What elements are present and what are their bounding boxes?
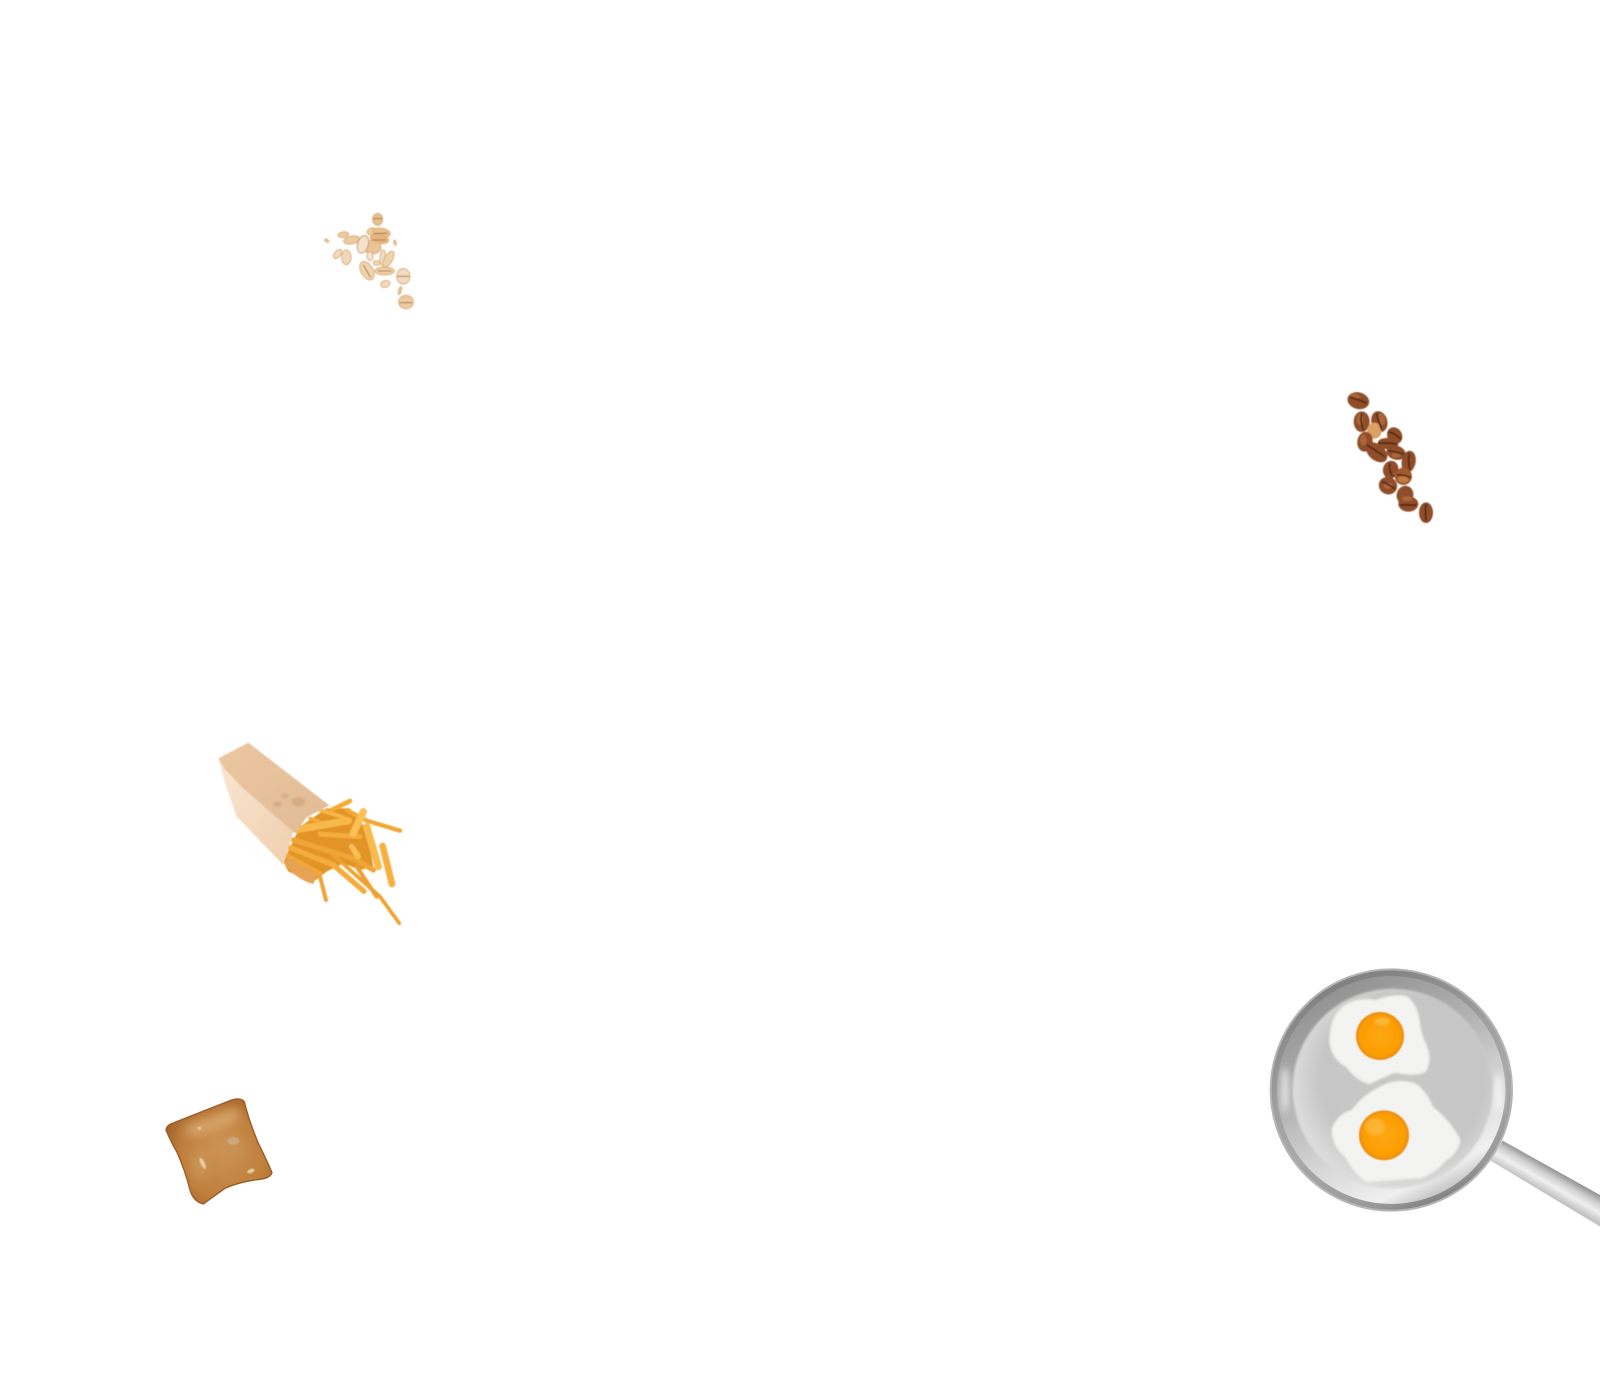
pan handle — [1491, 1141, 1600, 1227]
icon: french fries in a paper bag — [218, 743, 400, 923]
egg: lower — [1332, 1081, 1461, 1182]
fries mass — [283, 808, 373, 882]
bag top panel — [218, 743, 329, 833]
icon: slice of toast — [166, 1099, 272, 1204]
icon: frying pan with two fried eggs — [1271, 969, 1600, 1227]
bag front panel — [218, 758, 293, 865]
icon: coffee beans — [1346, 390, 1433, 523]
pan body — [1271, 969, 1512, 1211]
egg: upper — [1329, 995, 1429, 1084]
icon: oat flakes — [324, 213, 413, 309]
